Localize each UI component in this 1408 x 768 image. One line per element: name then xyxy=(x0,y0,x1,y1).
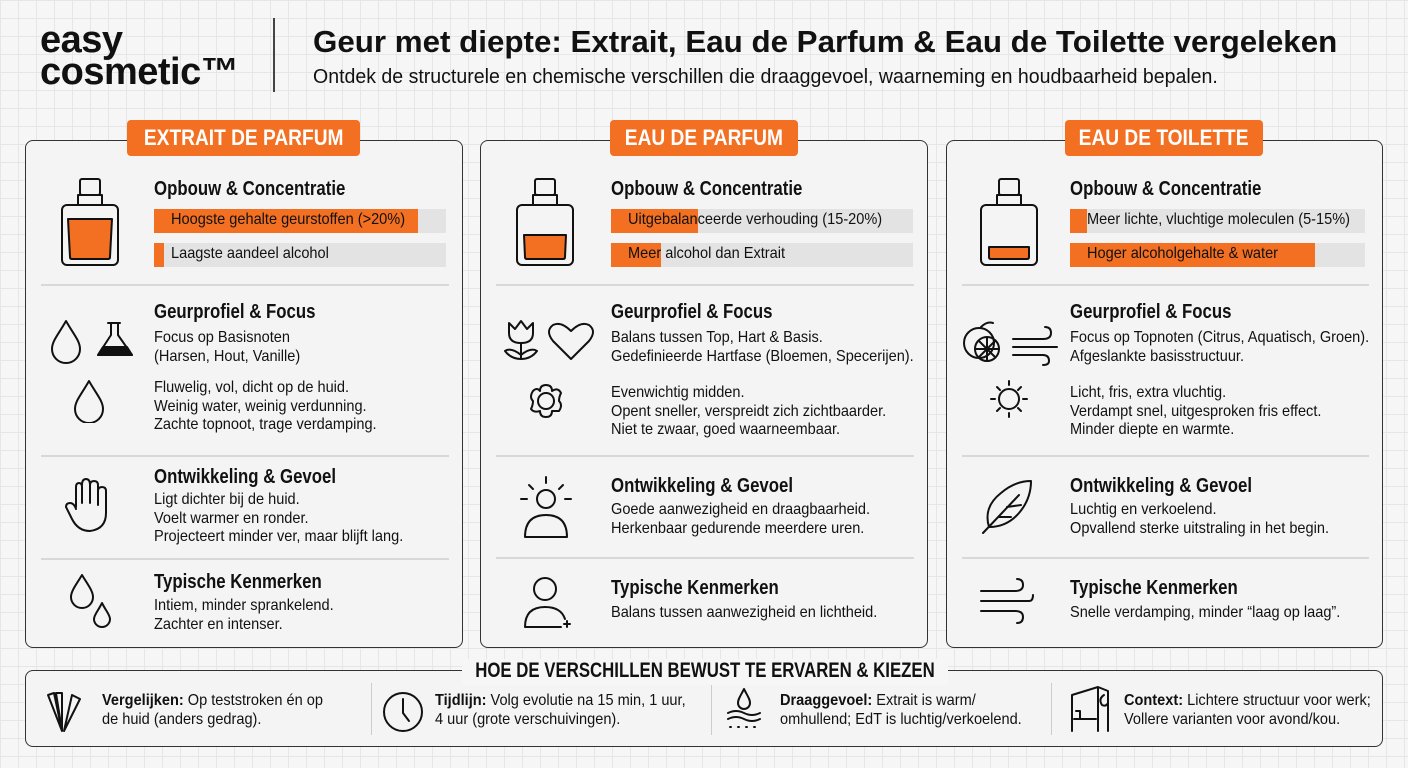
text: Focus op Topnoten (Citrus, Aquatisch, Groen). xyxy=(1070,329,1369,346)
tip: draaggevoel: omhullend; EdT is luchtig/verkoelend. xyxy=(780,711,1022,728)
heading: Opbouw & Concentratie xyxy=(154,178,345,200)
icon: clock xyxy=(383,692,423,732)
badge: eau de parfum xyxy=(610,120,798,156)
bar: geurstoffen: Hoogste gehalte geurstoffen (>20%) xyxy=(171,211,405,228)
bar xyxy=(611,243,913,267)
text: Voelt warmer en ronder. xyxy=(154,510,309,526)
bar xyxy=(1070,209,1365,233)
text: Herkenbaar gedurende meerdere uren. xyxy=(611,520,864,536)
bar: Meer alcohol dan Extrait xyxy=(628,245,785,262)
icon: hand xyxy=(65,478,107,532)
subtitle: Ontdek de structurele en chemische verschillen die draaggevoel, waarneming en houdbaarheid bepalen. xyxy=(313,66,1218,88)
text: Snelle verdamping, minder “laag op laag”. xyxy=(1070,604,1340,621)
panel: eau de parfum xyxy=(480,140,928,648)
tip: vergelijken xyxy=(47,692,323,732)
heading: Opbouw & Concentratie xyxy=(611,178,802,200)
logo xyxy=(40,19,238,93)
text: Opent sneller, verspreidt zich zichtbaarder. xyxy=(611,402,886,420)
text: Focus op Basisnoten xyxy=(154,329,290,346)
heading: Geurprofiel & Focus xyxy=(1070,301,1231,323)
text: Balans tussen aanwezigheid en lichtheid. xyxy=(611,604,877,621)
text: Ligt dichter bij de huid. xyxy=(154,491,300,508)
bar xyxy=(611,209,913,233)
text: Licht, fris, extra vluchtig. xyxy=(1070,384,1226,401)
bar: alcohol xyxy=(154,243,446,267)
text: Evenwichtig midden. xyxy=(611,384,745,401)
badge: eau de toilette xyxy=(1065,120,1263,156)
text: Gedefinieerde Hartfase (Bloemen, Specerijen). xyxy=(611,348,914,364)
bar: Uitgebalanceerde verhouding (15-20%) xyxy=(628,211,882,228)
text: Zachter en intenser. xyxy=(154,616,283,632)
icon: skin drop xyxy=(727,688,761,728)
text: Goede aanwezigheid en draagbaarheid. xyxy=(611,501,870,518)
text xyxy=(154,597,334,632)
icon: person with aura xyxy=(520,476,572,538)
icon: bottle low xyxy=(980,178,1038,266)
tip: draaggevoel xyxy=(711,683,1051,735)
bar xyxy=(1070,243,1365,267)
text: Zachte topnoot, trage verdamping. xyxy=(154,416,377,433)
text: Projecteert minder ver, maar blijft lang. xyxy=(154,528,403,545)
icon: feather xyxy=(982,480,1032,534)
icon: citrus, wind, sun xyxy=(963,322,1058,418)
heading: Opbouw & Concentratie xyxy=(1070,178,1261,200)
logo: easy xyxy=(40,19,123,61)
heading: Geurprofiel & Focus xyxy=(154,301,315,323)
text: Fluwelig, vol, dicht op de huid. xyxy=(154,379,349,396)
text xyxy=(611,329,914,364)
text: Afgeslankte basisstructuur. xyxy=(1070,348,1244,364)
tip: tijdlijn: 4 uur (grote verschuivingen). xyxy=(435,711,620,728)
heading: Ontwikkeling & Gevoel xyxy=(154,466,336,488)
text xyxy=(1070,501,1329,536)
icon: wind xyxy=(980,578,1034,624)
heading: Typische Kenmerken xyxy=(154,571,322,593)
bar: alcohol: Laagste aandeel alcohol xyxy=(171,245,329,262)
tip: context: Context: Lichtere structuur voor werk; xyxy=(1124,692,1371,709)
bar: geurstoffen xyxy=(154,209,446,233)
heading: Typische Kenmerken xyxy=(611,577,779,599)
text xyxy=(154,491,403,545)
text xyxy=(154,379,377,433)
badge: eau de toilette: EAU DE TOILETTE xyxy=(1079,125,1249,150)
text: Luchtig en verkoelend. xyxy=(1070,501,1217,518)
text: (Harsen, Hout, Vanille) xyxy=(154,348,300,364)
logo: cosmetic™ xyxy=(40,51,238,93)
icon: window bed xyxy=(1071,686,1109,732)
icon: flower heart cog xyxy=(504,320,594,418)
text xyxy=(611,384,886,438)
badge: extrait xyxy=(127,120,360,156)
text: Minder diepte en warmte. xyxy=(1070,421,1234,438)
heading: Ontwikkeling & Gevoel xyxy=(611,475,793,497)
panel: bottom tips xyxy=(25,670,1383,747)
text: Niet te zwaar, goed waarneembaar. xyxy=(611,421,840,438)
tip: vergelijken: Vergelijken: Op teststroken én op xyxy=(102,692,323,709)
heading: Geurprofiel & Focus xyxy=(611,301,772,323)
text: Verdampt snel, uitgesproken fris effect. xyxy=(1070,402,1321,420)
tip: vergelijken: de huid (anders gedrag). xyxy=(102,711,261,728)
text: Intiem, minder sprankelend. xyxy=(154,597,334,614)
bar: Meer lichte, vluchtige moleculen (5-15%) xyxy=(1087,211,1350,228)
tip: context xyxy=(1051,683,1381,735)
badge: eau de parfum: EAU DE PARFUM xyxy=(625,125,783,150)
icon: person xyxy=(524,577,571,628)
text xyxy=(611,501,870,536)
badge: extrait: EXTRAIT DE PARFUM xyxy=(144,125,343,150)
icon: test strips xyxy=(47,692,81,732)
bar: Hoger alcoholgehalte & water xyxy=(1087,245,1278,262)
text: Weinig water, weinig verdunning. xyxy=(154,398,367,414)
text xyxy=(1070,384,1321,438)
heading: Ontwikkeling & Gevoel xyxy=(1070,475,1252,497)
text xyxy=(1070,329,1369,364)
panel: extrait xyxy=(25,140,463,648)
text: Balans tussen Top, Hart & Basis. xyxy=(611,329,823,346)
panel: eau de toilette xyxy=(946,140,1383,648)
tip: draaggevoel: Draaggevoel: Extrait is warm/ xyxy=(780,692,976,709)
icon: drops xyxy=(70,574,111,628)
text: Opvallend sterke uitstraling in het begin. xyxy=(1070,520,1329,536)
tip: context: Vollere varianten voor avond/kou. xyxy=(1124,711,1340,728)
heading: Typische Kenmerken xyxy=(1070,577,1238,599)
title: Geur met diepte: Extrait, Eau de Parfum & Eau de Toilette vergeleken xyxy=(313,24,1337,59)
header divider xyxy=(273,18,274,92)
tip: tijdlijn: Tijdlijn: Volg evolutie na 15 min, 1 uur, xyxy=(435,692,686,709)
icon: drops and flask xyxy=(51,320,133,423)
heading: bottom section: HOE DE VERSCHILLEN BEWUST TE ERVAREN & KIEZEN xyxy=(475,659,935,682)
icon: bottle half xyxy=(516,178,574,266)
text xyxy=(154,329,300,364)
icon: bottle full xyxy=(61,178,119,266)
tip: tijdlijn xyxy=(371,683,711,735)
